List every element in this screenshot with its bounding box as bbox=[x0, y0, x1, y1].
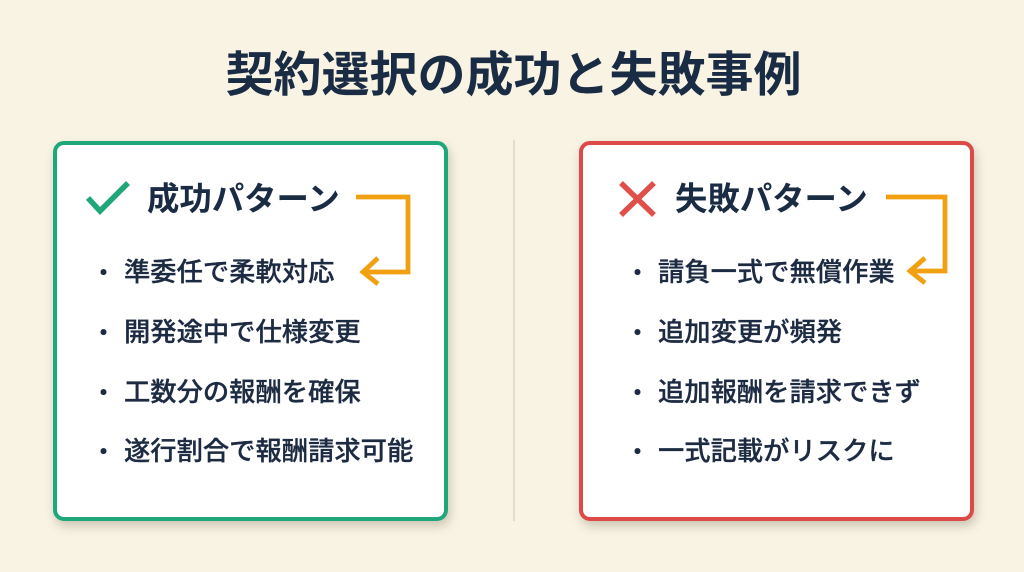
list: failure items bbox=[634, 257, 921, 466]
icon: cross mark bbox=[619, 181, 656, 217]
item 4: 遂行割合で報酬請求可能 bbox=[124, 436, 413, 466]
item 4: • bbox=[634, 441, 641, 463]
list: success items bbox=[100, 257, 413, 466]
icon: check mark bbox=[86, 181, 130, 215]
heading: failure pattern: 失敗パターン bbox=[675, 181, 868, 217]
item 2: 開発途中で仕様変更 bbox=[124, 317, 361, 347]
arrow: success bbox=[356, 194, 410, 286]
title: 契約選択の成功と失敗事例 bbox=[225, 49, 802, 102]
item 3: 追加報酬を請求できず bbox=[658, 377, 921, 407]
arrow: failure bbox=[886, 194, 948, 285]
item 3: 工数分の報酬を確保 bbox=[124, 377, 361, 407]
item 2: • bbox=[100, 322, 107, 344]
item 3: • bbox=[100, 382, 107, 404]
panel: failure pattern bbox=[579, 141, 974, 521]
item 4: 一式記載がリスクに bbox=[658, 436, 895, 466]
panel: success pattern bbox=[53, 141, 448, 521]
item 1: 請負一式で無償作業 bbox=[658, 257, 895, 287]
heading: success pattern: 成功パターン bbox=[147, 181, 340, 217]
item 2: 追加変更が頻発 bbox=[658, 317, 842, 347]
item 1: • bbox=[100, 262, 107, 284]
item 3: • bbox=[634, 382, 641, 404]
item 4: • bbox=[100, 441, 107, 463]
item 1: • bbox=[634, 262, 641, 284]
divider bbox=[513, 140, 515, 521]
item 1: 準委任で柔軟対応 bbox=[124, 257, 334, 287]
item 2: • bbox=[634, 322, 641, 344]
